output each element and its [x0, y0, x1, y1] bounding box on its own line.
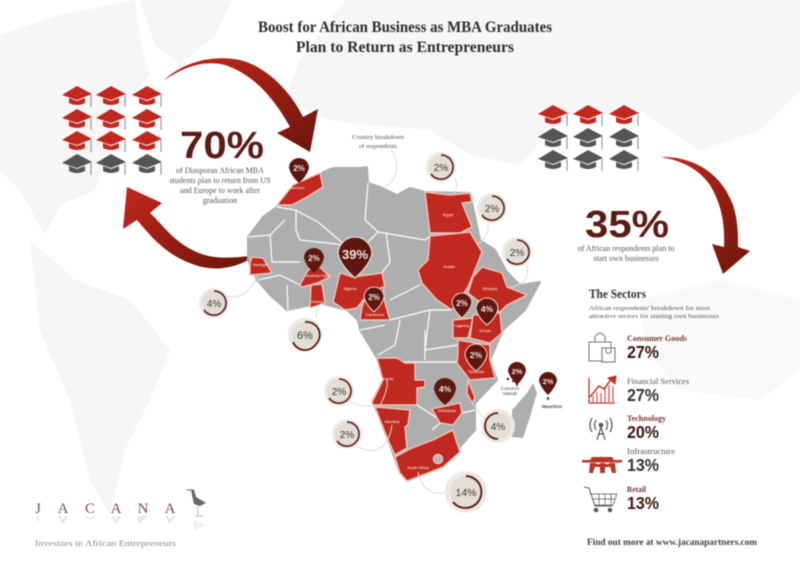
- sector: retail: 13%: [627, 493, 659, 513]
- pin: Burkina Faso 2%: 2%: [308, 254, 320, 263]
- map of Africa: [248, 167, 540, 481]
- pin: Burkina Faso 2%: [304, 248, 324, 273]
- ring: Ethiopia 2%: 2%: [510, 248, 524, 259]
- country names: Ghana: [311, 299, 324, 304]
- sector: retail: [584, 485, 659, 513]
- country names: Cameroon: [366, 312, 384, 317]
- pin: Morocco 2%: 2%: [293, 164, 305, 173]
- pin: Mauritius 2%: 2%: [543, 377, 554, 386]
- country names: South Africa: [407, 465, 430, 470]
- 70 percent statistic: 70%: [180, 125, 264, 167]
- sector: infrastructure: 13%: [627, 455, 659, 475]
- 70 percent statistic: graduation: [203, 196, 237, 205]
- sectors heading: African respondents' breakdown for most: [589, 305, 710, 312]
- 35 percent statistic: [578, 204, 674, 263]
- sector: retail: Retail: [627, 485, 647, 494]
- icon: jacana bird: [186, 489, 206, 531]
- logo: Jacana: A: [58, 501, 69, 517]
- logo: Jacana: C: [85, 501, 95, 517]
- pin: Uganda 2%: [452, 293, 472, 318]
- title: [258, 19, 552, 56]
- icon: shopping bags: [589, 333, 615, 362]
- Namibia: [375, 407, 410, 455]
- pin: Kenya 4%: [476, 298, 498, 325]
- Lesotho: [434, 454, 442, 464]
- Egypt: [425, 192, 472, 233]
- sector: technology: 20%: [627, 422, 659, 442]
- ring: Egypt 2%: 2%: [434, 163, 448, 174]
- pin: Comoros 2%: Comoros: [501, 386, 520, 391]
- Senegal: [250, 257, 272, 275]
- pin: Cameroon 2%: 2%: [368, 293, 380, 302]
- 70 percent statistic: [169, 125, 271, 205]
- sector: technology: [590, 414, 666, 442]
- sectors heading: attractive sectors for starting own businesses: [589, 313, 720, 320]
- pin: Nigeria 39%: [338, 237, 372, 278]
- sector: consumer goods: Consumer Goods: [627, 334, 688, 343]
- Madagascar: [512, 383, 537, 438]
- sector: consumer goods: 27%: [627, 342, 659, 362]
- logo: Jacana: J: [35, 501, 41, 517]
- pin: Morocco 2%: [289, 158, 309, 183]
- Kenya: [470, 313, 502, 343]
- sector: financial services: 27%: [627, 385, 659, 405]
- arrow: to sectors: [660, 157, 750, 274]
- ring: Mozambique 4%: 4%: [491, 422, 505, 433]
- ring: South Africa 14%: [445, 471, 487, 513]
- pin: Cameroon 2%: [364, 287, 384, 312]
- Nigeria: [333, 273, 385, 310]
- country names: Angola: [381, 376, 394, 381]
- ring: Mozambique 4%: [481, 409, 515, 443]
- country names: Namibia: [385, 419, 400, 424]
- country names: [253, 185, 498, 470]
- graduation caps: 35 percent: [538, 105, 639, 171]
- pin: Tanzania 2%: [465, 344, 487, 371]
- Burkina Faso: [300, 267, 330, 287]
- title: Plan to Return as Entrepreneurs: [296, 39, 514, 56]
- 35 percent statistic: 35%: [585, 204, 669, 246]
- ring: Ethiopia 2%: [502, 237, 532, 267]
- ring: Namibia 2%: 2%: [340, 430, 354, 441]
- pin: Comoros 2%: Islands: [503, 391, 518, 396]
- South Africa: [395, 430, 460, 481]
- country names: Burkina Faso: [306, 273, 331, 278]
- pin: Mauritius 2%: [539, 372, 562, 409]
- 70 percent statistic: and Europe to work after: [180, 186, 260, 195]
- country names: Morocco: [289, 185, 305, 190]
- arrow: from Africa: [123, 187, 252, 269]
- pin: Uganda 2%: 2%: [456, 299, 468, 308]
- connector lines: [228, 150, 528, 493]
- country names: Sudan: [443, 264, 455, 269]
- sector: financial services: [589, 376, 689, 405]
- pin: Kenya 4%: 4%: [481, 304, 494, 314]
- internal borders: [248, 183, 475, 430]
- 35 percent statistic: of African respondents plan to: [578, 244, 674, 253]
- ring: Ghana 6%: [288, 318, 322, 352]
- title: Boost for African Business as MBA Graduates: [258, 19, 552, 36]
- website link: Find out more at www.jacanapartners.com: [587, 538, 757, 548]
- country names: Nigeria: [344, 286, 357, 291]
- graduation caps: 70 percent: [62, 86, 162, 175]
- logo: Jacana: Investors in African Entrepreneurs: [35, 538, 176, 548]
- pin: Mauritius 2%: Mauritius: [542, 404, 562, 409]
- icon: shopping cart: [584, 487, 617, 512]
- pin: Tanzania 2%: 2%: [470, 350, 483, 360]
- logo: Jacana: N: [138, 501, 149, 517]
- pin: Nigeria 39%: 39%: [342, 247, 368, 262]
- sector: financial services: Financial Services: [627, 377, 689, 386]
- pin: Zimbabwe 4%: 4%: [439, 384, 452, 394]
- country names: Egypt: [443, 212, 454, 217]
- pin: Comoros 2%: 2%: [512, 367, 523, 376]
- country names: Tanzania: [468, 369, 485, 374]
- Uganda: [453, 318, 473, 338]
- ring: Angola 2%: 2%: [332, 387, 346, 398]
- icon: antenna: [590, 418, 612, 440]
- Cameroon: [360, 287, 390, 320]
- country names: Kenya: [479, 328, 491, 333]
- ring: Senegal 4%: 4%: [207, 299, 221, 310]
- Zimbabwe: [432, 403, 462, 425]
- ring: Namibia 2%: [332, 419, 362, 449]
- Tanzania: [457, 340, 495, 380]
- ring: Ghana 6%: 6%: [297, 330, 313, 342]
- Ethiopia: [468, 267, 527, 312]
- ring: Angola 2%: [324, 376, 354, 406]
- Malawi: [467, 380, 475, 403]
- logo: Jacana: A: [165, 501, 176, 517]
- sectors heading: The Sectors: [589, 287, 646, 301]
- country names: Senegal: [253, 262, 267, 267]
- note: country breakdown: of respondents: [359, 143, 398, 150]
- sectors heading: [589, 287, 720, 320]
- Angola: [372, 358, 425, 405]
- 70 percent statistic: students plan to return from US: [169, 176, 271, 185]
- icon: growth chart: [589, 376, 616, 403]
- 35 percent statistic: start own businesses: [593, 254, 659, 263]
- sector: infrastructure: Infrastructure: [627, 447, 675, 456]
- ring: Egypt 2%: [426, 152, 456, 182]
- arrow: to Africa: [163, 58, 318, 152]
- 70 percent statistic: of Diasporan African MBA: [176, 166, 264, 175]
- country names: Uganda: [455, 323, 470, 328]
- ring: Sudan 2%: 2%: [485, 204, 499, 215]
- Ghana: [310, 284, 325, 308]
- logo: Jacana: [35, 489, 206, 548]
- pin: Zimbabwe 4%: [434, 378, 456, 405]
- sector: consumer goods: [589, 333, 688, 362]
- note: country breakdown: Country breakdown: [352, 134, 405, 141]
- pin: Comoros 2%: [501, 362, 526, 396]
- logo: Jacana: A: [111, 501, 122, 517]
- ring: South Africa 14%: 14%: [455, 487, 477, 499]
- ring: Sudan 2%: [477, 193, 507, 223]
- country names: Ethiopia: [483, 286, 498, 291]
- Sudan: [418, 232, 482, 310]
- sector: infrastructure: [582, 447, 675, 475]
- icon: highway: [582, 457, 622, 473]
- Morocco: [277, 173, 323, 205]
- country names: Zimbabwe: [438, 408, 457, 413]
- note: country breakdown: [352, 134, 405, 150]
- sector: technology: Technology: [627, 414, 666, 423]
- ring: Senegal 4%: [199, 288, 229, 318]
